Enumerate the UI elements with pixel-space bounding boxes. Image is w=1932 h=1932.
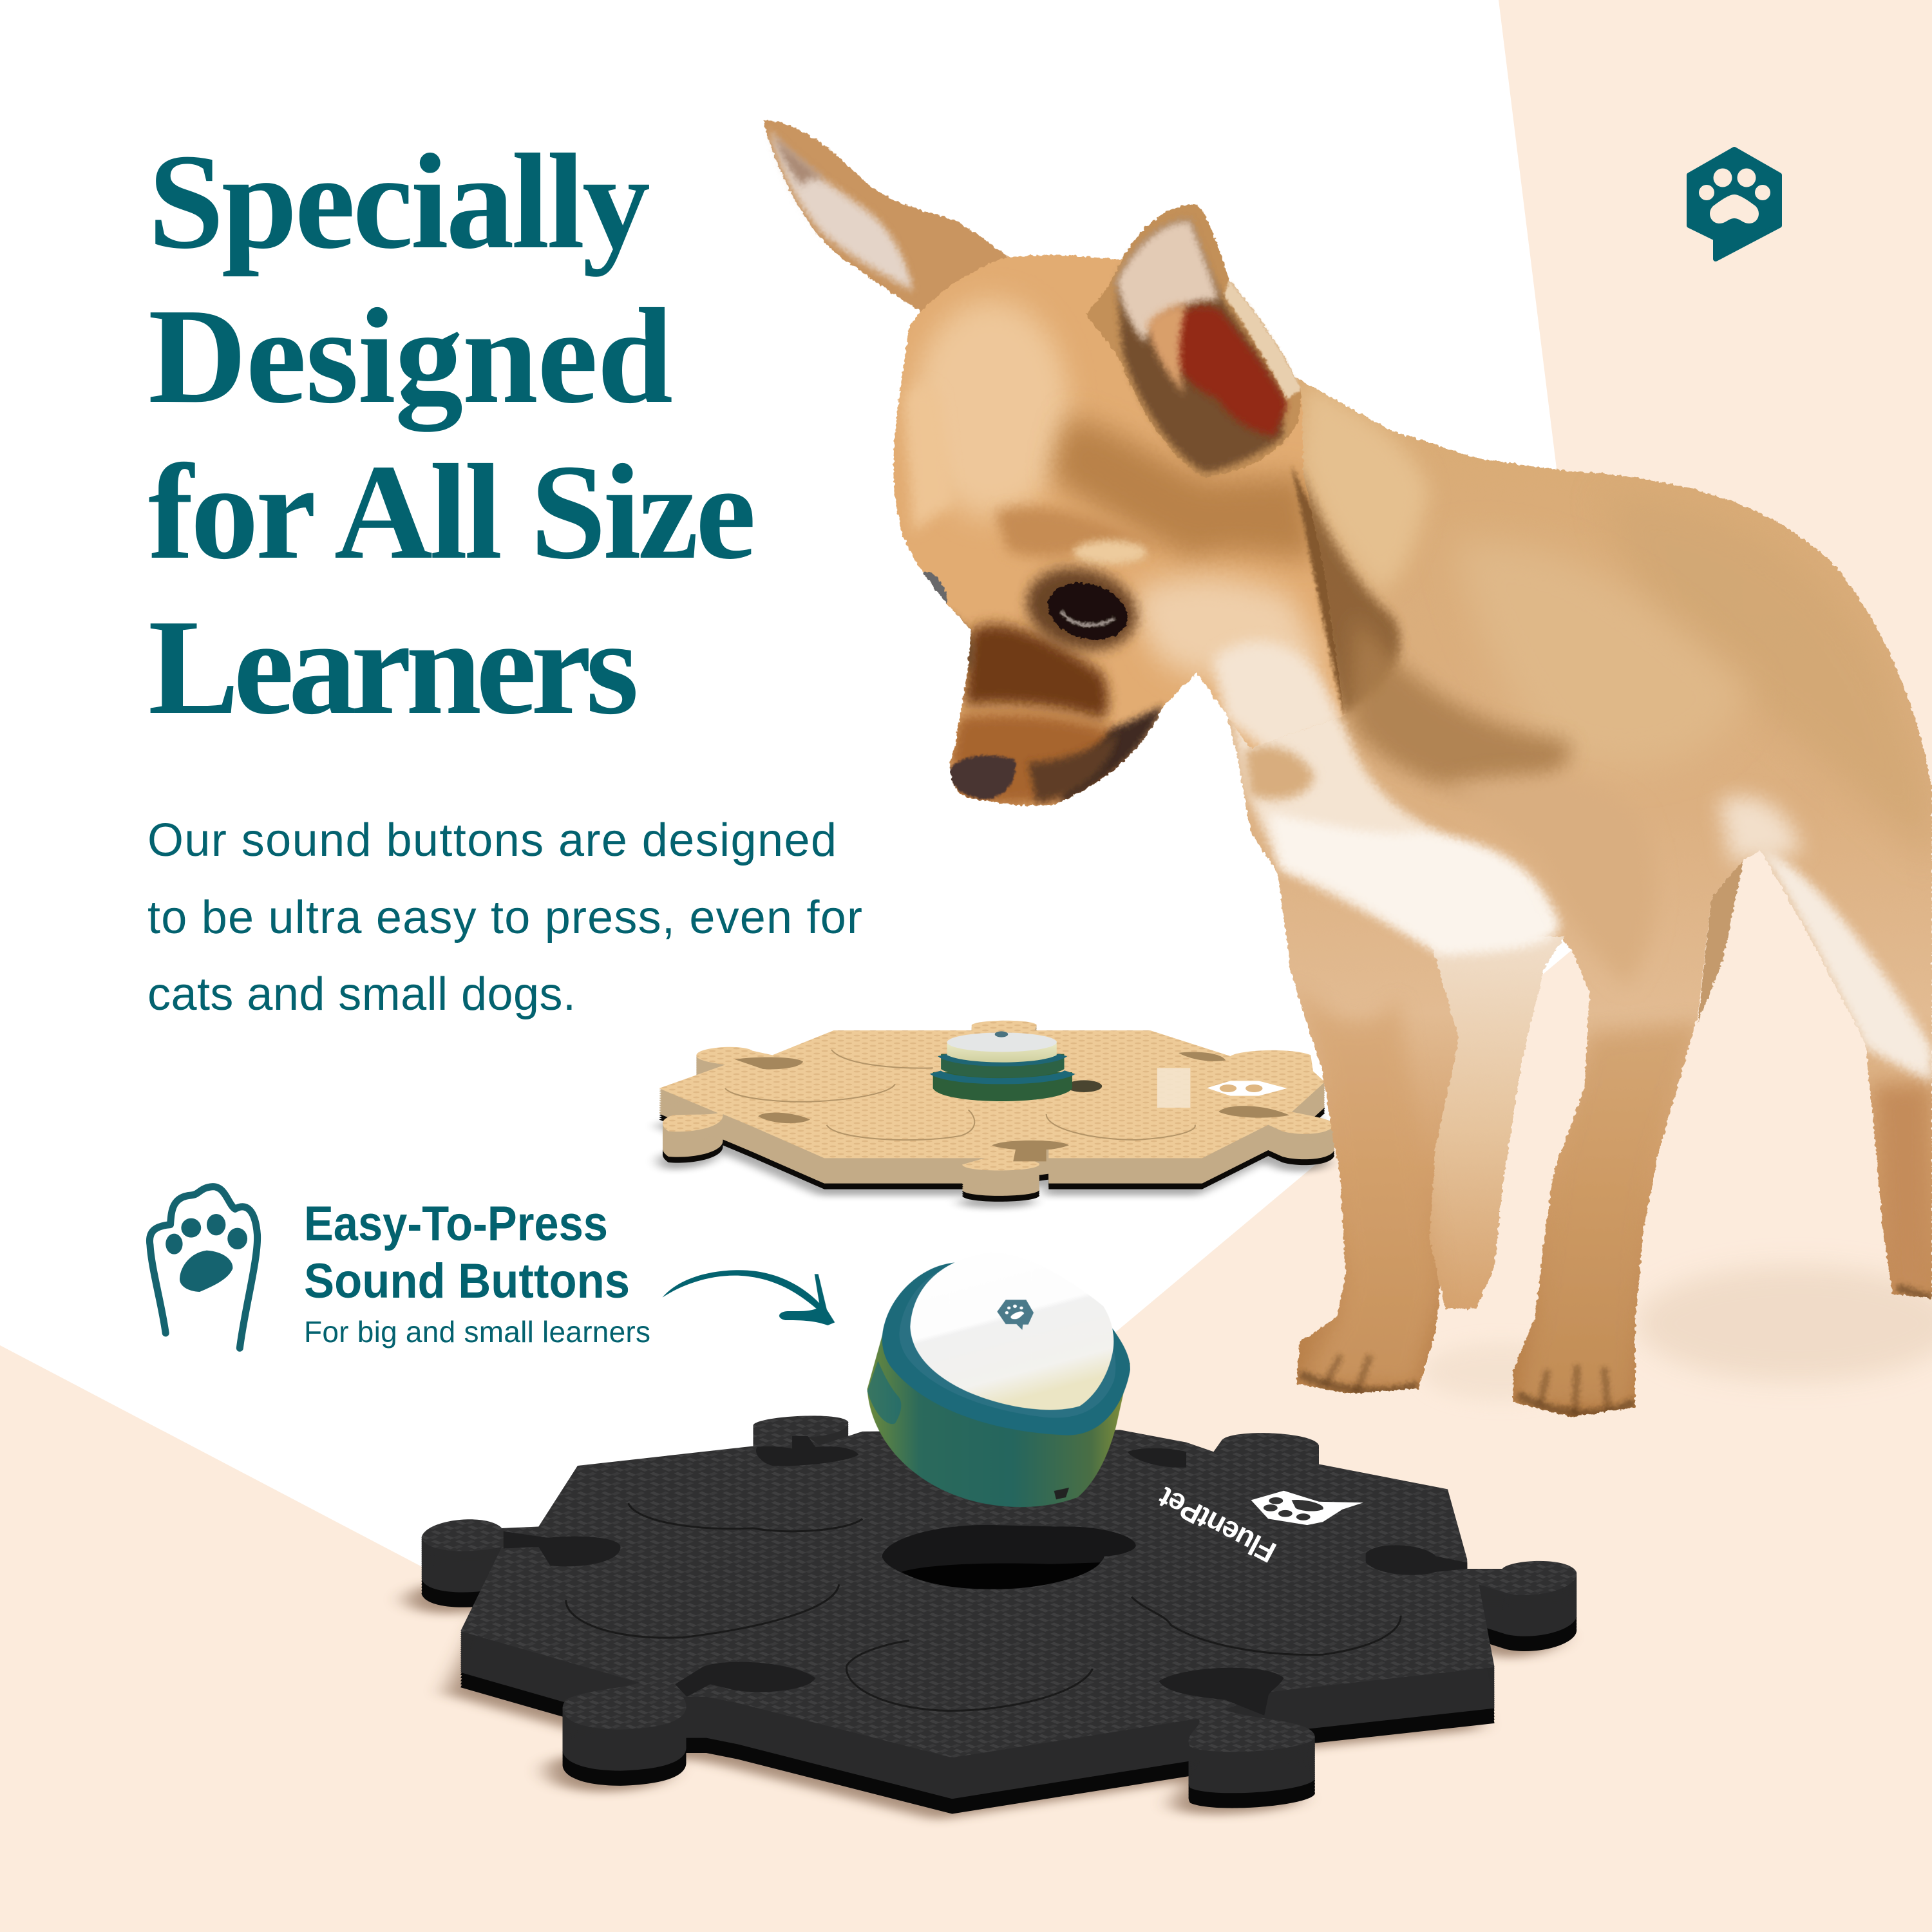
rear leg xyxy=(1873,1084,1932,1301)
title: Designed xyxy=(148,280,673,432)
cheek xyxy=(1135,577,1324,710)
black mat wordmark: FluentPet xyxy=(1153,1481,1282,1569)
black mat xyxy=(406,1416,1577,1820)
rump shading xyxy=(1719,577,1931,829)
neck dark stripe xyxy=(1291,465,1385,715)
head and ears xyxy=(763,120,1390,843)
cap logo xyxy=(997,1300,1034,1330)
muzzle xyxy=(951,713,1128,805)
tan mat underside xyxy=(659,1047,1334,1202)
body text: to be ultra easy to press, even for xyxy=(147,892,862,943)
muzzle dark xyxy=(965,624,1108,720)
black mat slots xyxy=(504,1436,1467,1716)
far front leg xyxy=(1429,936,1565,1309)
eye xyxy=(1043,575,1132,648)
chest cream xyxy=(1220,651,1540,951)
flank light xyxy=(1462,542,1742,749)
black mat recesses xyxy=(566,1503,1401,1711)
black mat underside xyxy=(422,1459,1577,1814)
title: Learners xyxy=(148,591,639,743)
near ear xyxy=(1086,204,1302,477)
feature label: For big and small learners xyxy=(304,1315,650,1349)
tan mat sides xyxy=(659,1022,1334,1196)
belly cream xyxy=(1719,797,1801,862)
title: for All Size xyxy=(148,436,756,587)
paw sketch icon xyxy=(149,1187,258,1348)
tan mat top xyxy=(659,1021,1334,1171)
tan mat with small button xyxy=(654,1021,1334,1208)
button cap xyxy=(910,1253,1113,1410)
black mat shadow xyxy=(406,1478,1561,1820)
tan mat slots xyxy=(735,1052,1289,1161)
body text: Our sound buttons are designed xyxy=(147,815,837,866)
chest tan fleck xyxy=(1244,746,1314,799)
floor shadow xyxy=(1636,1265,1932,1381)
tan mat shadow xyxy=(654,1058,1330,1208)
eye socket xyxy=(1021,558,1142,659)
tan mat wordmark xyxy=(1157,1068,1190,1108)
dog body and legs xyxy=(1226,377,1932,1417)
title xyxy=(148,126,756,743)
forehead light xyxy=(913,299,1069,517)
white chest xyxy=(1269,813,1560,955)
logo: FluentPet paw hexagon xyxy=(1689,149,1779,259)
button collar xyxy=(882,1262,1130,1435)
body text: cats and small dogs. xyxy=(147,969,576,1020)
neck dark stripe xyxy=(1298,464,1400,715)
nose xyxy=(948,755,1016,799)
far ear xyxy=(763,120,1008,319)
tan mat logo xyxy=(1207,1081,1287,1096)
title: Specially xyxy=(148,126,650,277)
small button xyxy=(933,1031,1102,1101)
upper neck light xyxy=(1300,382,1429,591)
button body xyxy=(867,1335,1130,1507)
arrow to button xyxy=(663,1270,835,1325)
claws and toes xyxy=(1325,1356,1608,1417)
body text xyxy=(147,815,862,1020)
dog photo illustration xyxy=(763,120,1932,1429)
feature label: Sound Buttons xyxy=(304,1254,630,1309)
far eye xyxy=(915,566,952,614)
brow band dark xyxy=(1053,418,1316,560)
shoulder dark patch xyxy=(1349,616,1570,791)
feature label xyxy=(304,1197,650,1349)
black mat sides xyxy=(422,1417,1577,1799)
mouth xyxy=(1061,706,1164,805)
black mat logo xyxy=(1251,1491,1363,1525)
centre leg shading xyxy=(1513,1023,1700,1407)
centre chest tan xyxy=(1442,776,1656,986)
tan mat recesses xyxy=(725,1050,1195,1140)
large sound button xyxy=(867,1253,1130,1507)
near front leg shading xyxy=(1291,986,1441,1388)
button port xyxy=(1054,1488,1069,1499)
head xyxy=(884,238,1390,843)
far rear leg xyxy=(1698,860,1743,1023)
rear cream stripe xyxy=(1761,850,1932,1084)
hole in black mat xyxy=(882,1525,1136,1589)
black mat top xyxy=(422,1416,1577,1757)
feature label: Easy-To-Press xyxy=(304,1197,608,1251)
